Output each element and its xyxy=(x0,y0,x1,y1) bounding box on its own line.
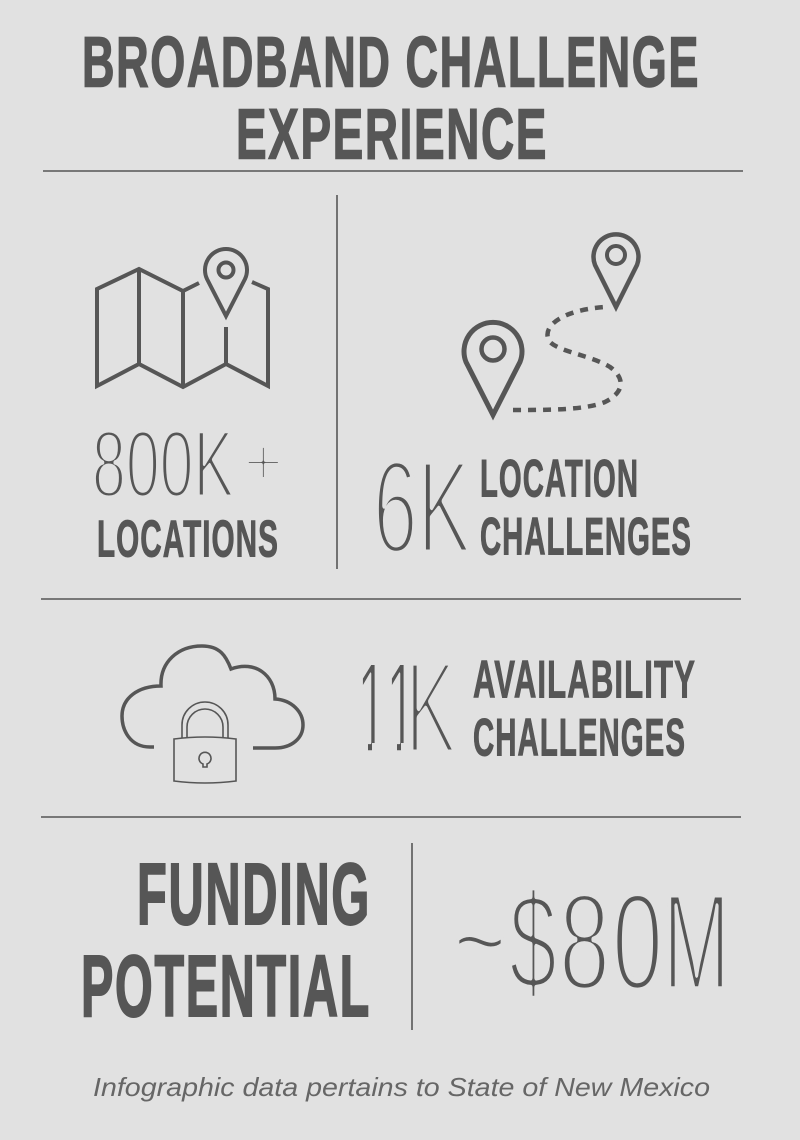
icon: cloud with padlock xyxy=(122,646,303,783)
label: funding potential xyxy=(81,846,371,1035)
panel: 800K locations xyxy=(92,249,283,568)
stat: ~$80M: ~ xyxy=(454,885,506,997)
stat: ~$80M: M xyxy=(663,866,730,1019)
stat: 800K +: 800K xyxy=(92,412,234,518)
panel: funding potential xyxy=(81,846,730,1035)
stat: ~$80M: 8 xyxy=(559,866,610,1019)
label: availability challenges xyxy=(473,650,696,768)
label: locations: LOCATIONS xyxy=(97,510,279,568)
stat: 6K: 6K xyxy=(373,434,471,580)
stat: ~$80M: $ xyxy=(509,866,557,1019)
icon: folded map with pin xyxy=(97,249,268,387)
panel: 11K availability challenges xyxy=(122,634,696,783)
footnote: Infographic data pertains to State of New Mexico xyxy=(93,1072,710,1102)
stat: ~$80M xyxy=(454,866,730,1019)
title xyxy=(82,24,700,174)
stat: 11K: 1 xyxy=(386,636,416,780)
icon: route between two pins xyxy=(464,234,638,415)
stat: 800K +: + xyxy=(244,424,283,500)
stat: ~$80M: 0 xyxy=(612,866,663,1019)
label: funding potential: POTENTIAL xyxy=(81,938,371,1035)
label: location challenges xyxy=(480,450,692,566)
stat: 11K: K xyxy=(405,634,457,781)
label: funding potential: FUNDING xyxy=(137,846,371,943)
title: EXPERIENCE xyxy=(236,96,548,174)
panel: 6K location challenges xyxy=(373,234,692,581)
stat: 11K: 1 xyxy=(357,636,387,780)
stat: 11K xyxy=(355,634,457,781)
label: location challenges: LOCATION xyxy=(480,450,639,508)
